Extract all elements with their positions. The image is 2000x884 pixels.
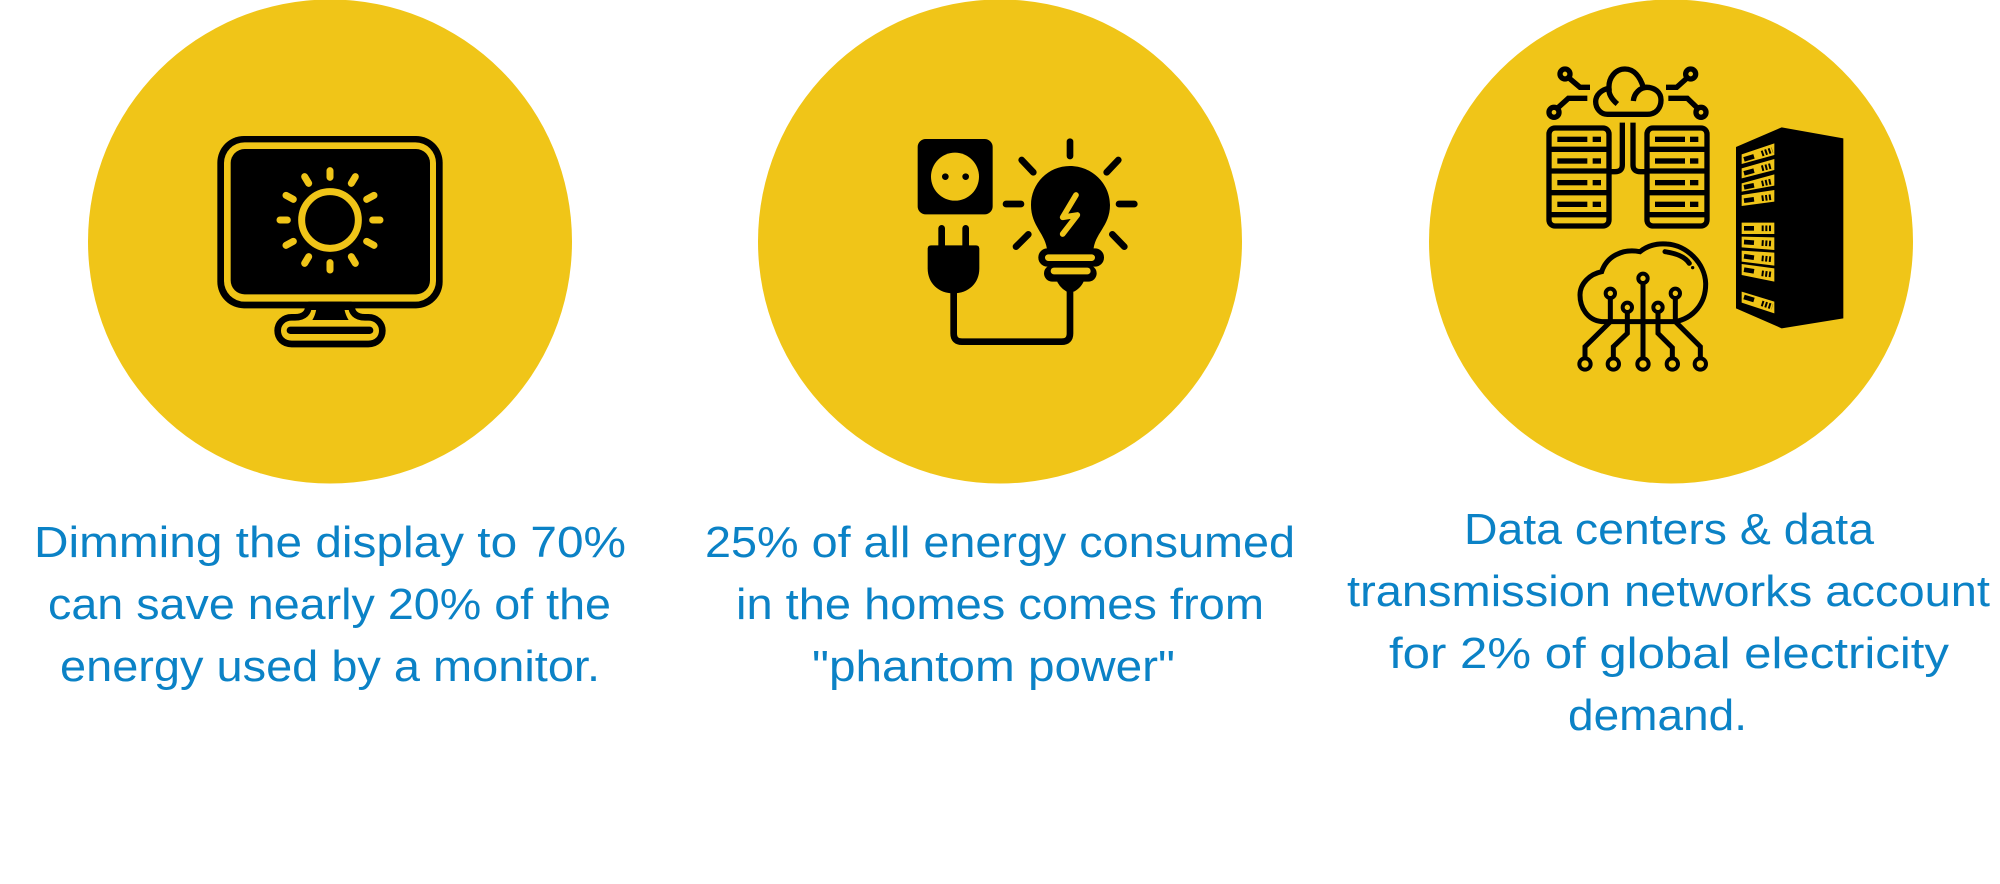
text: data center fact: transmission networks account <box>1347 567 1990 616</box>
text: phantom power fact <box>705 518 1295 691</box>
text: phantom power fact: in the homes comes from <box>736 580 1264 629</box>
panel: phantom power <box>705 0 1295 691</box>
icon: servers and cloud networks <box>1549 69 1843 370</box>
icon: cloud with server racks <box>1549 69 1707 226</box>
text: data center fact: demand. <box>1568 691 1747 740</box>
text: data center fact: Data centers & data <box>1464 505 1875 554</box>
icon: cloud with circuit traces <box>1579 244 1706 370</box>
icon: monitor with sun <box>217 136 443 344</box>
text: phantom power fact: 25% of all energy consumed <box>705 518 1295 567</box>
yellow circle: phantom power <box>758 0 1242 484</box>
text: phantom power fact: "phantom power" <box>812 642 1175 691</box>
yellow circle: monitor <box>88 0 572 484</box>
text: monitor fact <box>34 518 626 691</box>
text: data center fact: for 2% of global electricity <box>1389 629 1949 678</box>
text: data center fact <box>1347 505 1990 740</box>
icon: server tower <box>1736 127 1843 328</box>
panel: data centers <box>1347 0 1990 740</box>
text: monitor fact: energy used by a monitor. <box>60 642 600 691</box>
text: monitor fact: Dimming the display to 70% <box>34 518 626 567</box>
yellow circle: data centers <box>1429 0 1913 484</box>
panel: monitor dimming <box>34 0 626 691</box>
text: monitor fact: can save nearly 20% of the <box>48 580 611 629</box>
icon: plug, socket and light bulb <box>918 139 1134 342</box>
